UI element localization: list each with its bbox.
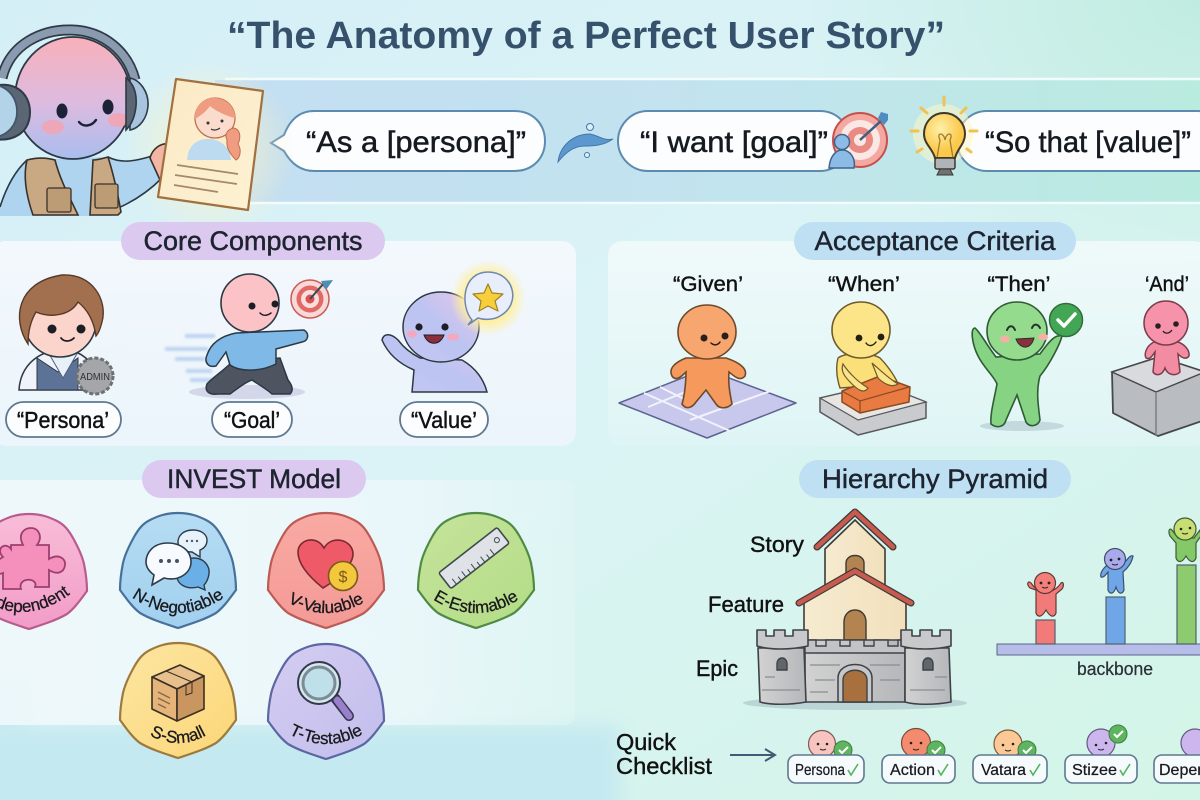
chip: stizee [1065,725,1137,783]
label: story: Story [750,532,804,557]
castle illustration [743,512,967,710]
badge: valuable [266,512,386,630]
heading pill: core components: Core Components [144,226,362,256]
badge: estimable: E-Estimable [434,590,518,614]
arrow [730,749,775,761]
icon: puzzle piece [0,528,65,589]
badge: negotiable: N-Negotiable [132,588,223,616]
character: goal [165,274,308,399]
speech bubble: as a persona: “As a [persona]” [306,126,526,159]
headphones [0,30,148,140]
icon: heart and coin: $ [339,569,348,586]
panel: user story template banner [215,79,1200,203]
label: quick checklist: Quick [616,729,677,755]
figure: when pressing brick [820,302,926,435]
section: core components [0,222,576,446]
chip: dependent [1154,729,1200,783]
label: feature: Feature [708,592,784,617]
icon: light bulb [911,97,977,175]
label: and: ‘And’ [1145,273,1189,296]
story tower [817,512,893,590]
bar and figure: blue [1101,548,1133,644]
character hand [150,144,172,180]
heading pill: core components [121,222,385,260]
chip: vatara: Vatara [981,762,1026,779]
badge: testable: T-Testable [292,723,362,744]
label pill: persona [6,402,121,437]
panel background [0,480,575,725]
label: quick checklist [616,729,713,779]
speech bubble: I want goal [618,111,850,171]
icon: cardboard box [152,665,204,721]
feature hall [799,571,911,645]
label: given: “Given’ [673,273,743,296]
badge: small [118,642,238,760]
chip: persona [788,730,864,783]
speech bubble: so that value [957,111,1200,171]
chip: stizee: Stizee [1072,762,1117,779]
label: quick checklist: Checklist [616,753,713,779]
label pill: goal: “Goal’ [224,407,280,433]
badge: estimable [416,512,536,630]
label pill: value: “Value’ [411,407,477,433]
panel background [608,241,1200,446]
section: quick checklist [616,725,1200,783]
badge: valuable: V-Valuable [292,592,363,614]
heading pill: hierarchy pyramid [799,460,1071,498]
hero character with headphones and persona card [0,30,296,240]
title: “The Anatomy of a Perfect User Story” [227,15,945,57]
speech bubble: as a persona [271,111,545,171]
label: epic: Epic [696,656,738,681]
figure: and on grey box [1112,301,1200,436]
backbone bar [997,644,1200,655]
character head [15,37,131,159]
character: persona: ADMIN [80,372,110,383]
label: backbone: backbone [1077,659,1153,679]
chip: vatara [973,730,1047,783]
icon: star speech bubble [450,260,526,336]
badge: testable [266,642,386,760]
label: then: “Then’ [988,273,1050,296]
figure: then celebrating [972,302,1082,431]
badge: negotiable [118,512,238,630]
bar and figure: red [1028,572,1063,644]
backbone story map [997,518,1200,679]
panel background [0,241,576,446]
figure: given on floor plan [619,305,796,438]
character body with vest [0,156,162,216]
badge: independent [0,512,88,630]
icon: chat bubbles [146,530,209,590]
icon: target with person [829,112,888,168]
character: value [382,292,487,392]
speech bubble: I want goal: “I want [goal]” [640,126,828,159]
heading pill: acceptance criteria [794,222,1076,260]
icon: swoosh arrow [558,124,613,162]
chip: persona: Persona [795,762,845,779]
chip: action: Action [890,762,935,779]
bar and figure: green [1169,518,1200,644]
glow behind card [124,60,296,240]
section: hierarchy pyramid [696,460,1200,710]
label: when: “When’ [828,273,900,296]
badge: small: S-Small [151,724,206,744]
icon: goal target [291,280,333,318]
icon: magnifying glass [298,662,349,716]
section: acceptance criteria [608,222,1200,446]
heading pill: invest model: INVEST Model [167,464,341,494]
chip: action [882,728,955,783]
heading pill: hierarchy pyramid: Hierarchy Pyramid [822,464,1048,494]
section: invest model [0,460,572,760]
epic castle walls [757,630,951,704]
character: persona [19,275,113,394]
speech bubble: so that value: “So that [value]” [985,126,1191,159]
persona card [158,79,263,210]
icon: ruler [439,527,509,589]
heading pill: acceptance criteria: Acceptance Criteria [814,226,1056,256]
label pill: goal [212,402,292,437]
label pill: value [400,402,488,437]
label pill: persona: “Persona’ [17,407,109,433]
heading pill: invest model [142,460,366,498]
